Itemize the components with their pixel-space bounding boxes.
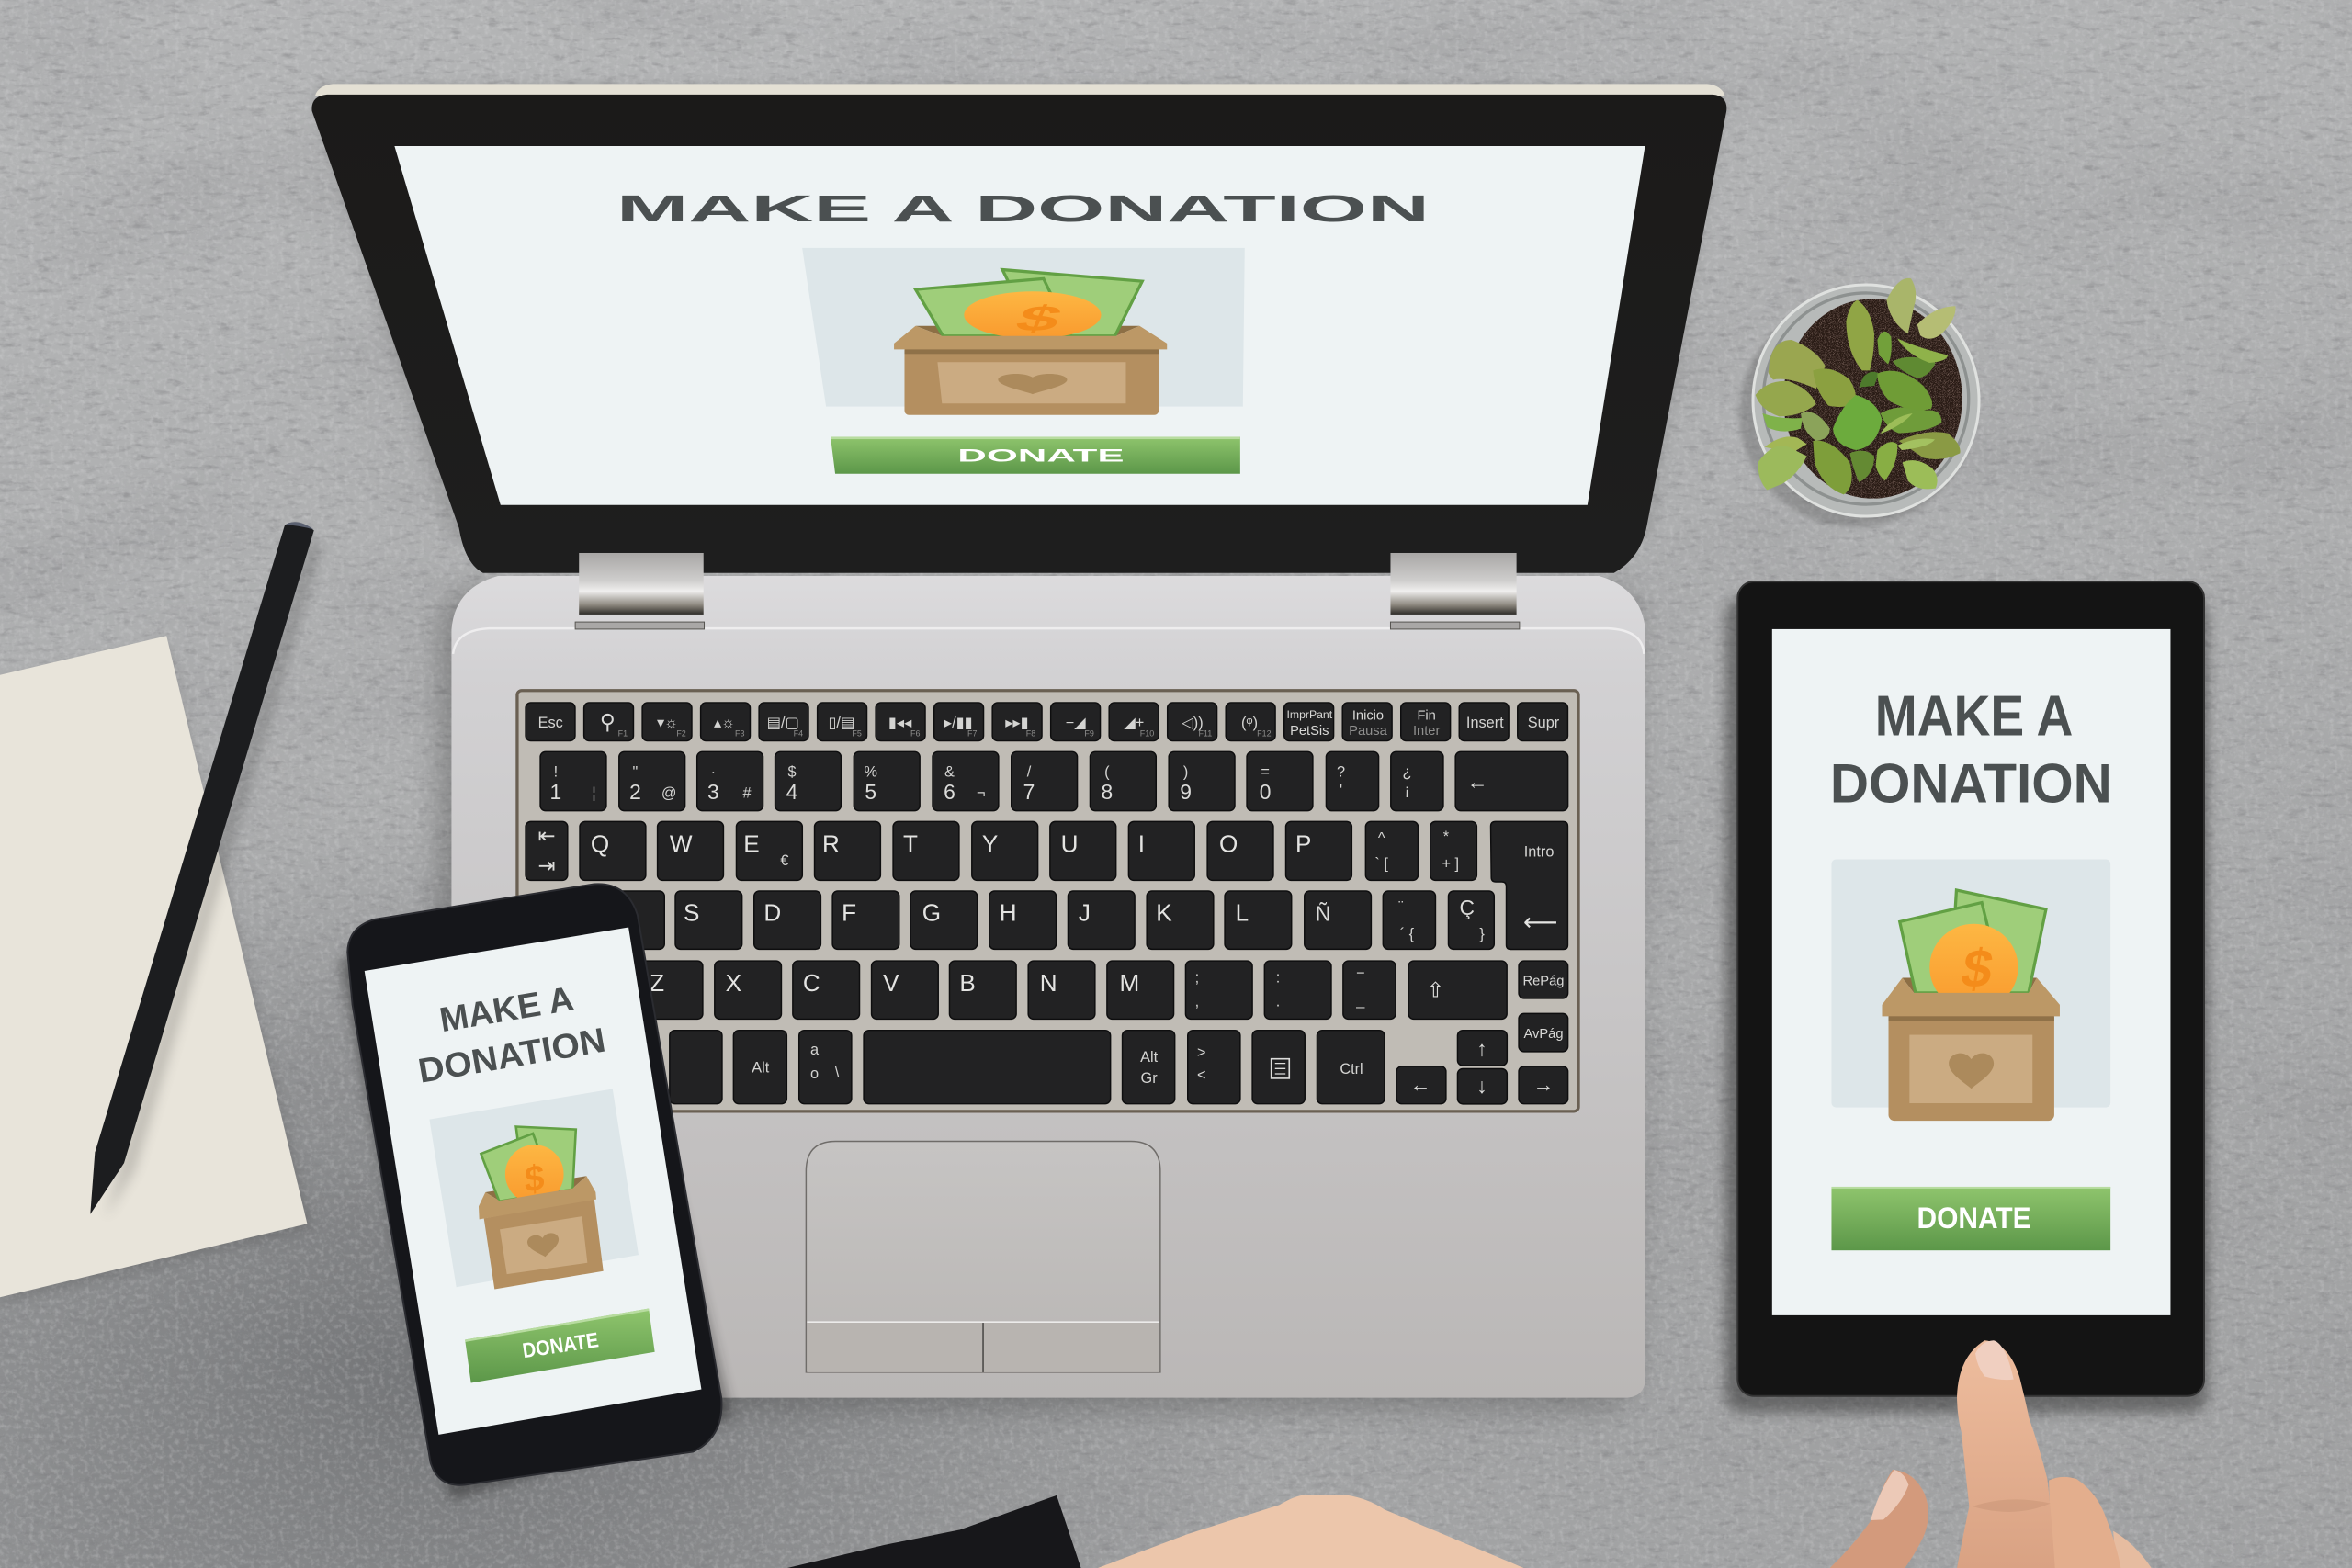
tablet screen [1772,629,2170,1315]
tablet screen title [1830,685,2112,815]
QWERTY key row: T [903,829,918,857]
bottom key row: \ [835,1064,840,1080]
laptop illustration: donation box [802,248,1245,415]
bottom key row: a [810,1042,820,1058]
QWERTY key row: ⇤ [538,824,556,848]
number key row: % [864,764,877,781]
ASDF key row: F [842,898,856,926]
hinges [575,553,1520,629]
laptop shadow [438,588,1638,1410]
left finger [1830,1470,1928,1568]
fingers [1830,1340,2152,1568]
plant pot shadow [1739,300,1973,526]
ZXCV key row: C [803,969,820,997]
black sleeve [785,1495,1081,1568]
smartphone screen title [415,979,608,1090]
function key row: Pausa [1349,724,1388,739]
smartphone illustration: donation box: $ [524,1156,545,1201]
function key row: −◢ [1066,715,1086,731]
tablet donate button [1831,1187,2110,1250]
ASDF key row: Ñ [1316,901,1330,925]
smartphone body [347,884,721,1485]
function key row: F4 [794,729,803,739]
number key row: · [711,764,716,781]
ASDF key row: J [1079,898,1091,926]
ZXCV key row: X [726,969,741,997]
QWERTY key row: R [822,829,840,857]
number key row: 4 [786,780,798,804]
index finger [1957,1340,2055,1568]
number key row: " [633,764,639,781]
ZXCV key row: N [1040,969,1057,997]
smartphone shadow [339,900,732,1500]
number key row: ? [1337,764,1345,781]
bottom key row: ↓ [1476,1074,1487,1098]
QWERTY key row: + ] [1442,855,1459,872]
QWERTY key row: Intro [1524,843,1554,860]
smartphone illustration: donation box [429,1089,639,1289]
ZXCV key row: RePág [1523,975,1564,989]
function key row: ◢+ [1124,715,1144,731]
function key row: F11 [1198,729,1212,739]
number key row: ' [1340,782,1342,798]
function key row [526,703,1567,741]
ASDF key row: D [763,898,781,926]
function key row: Fin [1417,709,1436,724]
bottom key row: Gr [1141,1070,1158,1087]
function key row: ▸/▮▮ [944,715,973,731]
number key row: 3 [707,780,719,804]
glass pot with soil [1753,285,1979,516]
tablet screen title: DONATION [1830,751,2112,815]
bottom key row: Alt [1140,1049,1159,1066]
ZXCV key row: _ [1355,992,1365,1009]
number key row [540,751,1568,811]
far finger behind [2113,1531,2152,1568]
tablet screen title: MAKE A [1875,685,2073,749]
bottom key row: o [810,1066,819,1082]
QWERTY key row: Q [591,829,609,857]
tablet body [1737,581,2204,1396]
ASDF key row: L [1236,898,1249,926]
bottom key row: → [1533,1073,1554,1097]
tablet [1725,581,2208,1413]
QWERTY key row: * [1443,829,1450,845]
number key row: & [944,764,955,781]
ASDF key row: Ç [1459,896,1475,919]
laptop screen title: MAKE A DONATION [616,187,1430,230]
ZXCV key row: , [1195,994,1199,1010]
number key row: ¬ [977,785,986,802]
laptop lid [311,84,1726,573]
bottom key row: ↑ [1476,1036,1487,1060]
function key row: ▤/▢ [767,715,799,731]
function key row: F10 [1140,729,1154,739]
tablet illustration: donation box [1831,860,2110,1121]
function key row: ⚲ [600,709,616,733]
function key row: ▸▸▮ [1005,715,1029,731]
function key row: ▮◂◂ [888,715,912,731]
ASDF key row: } [1479,926,1485,942]
function key row: F7 [967,729,978,739]
function key row: F9 [1084,729,1094,739]
ASDF key row: ´ { [1400,926,1415,942]
number key row: 2 [629,780,641,804]
potted plant [1739,278,1979,526]
smartphone donate button: DONATE [521,1327,600,1362]
function key row: F8 [1026,729,1035,739]
QWERTY key row: E [743,829,760,857]
smartphone screen title: MAKE A [436,979,576,1039]
bottom key row [670,1013,1568,1104]
smartphone screen [365,928,701,1435]
pen [90,522,324,1218]
function key row: F1 [618,729,628,739]
number key row: 6 [944,780,956,804]
number key row: @ [662,785,676,802]
laptop [311,84,1726,1410]
function key row: Esc [538,715,563,731]
function key row: Insert [1466,715,1504,731]
bottom key row: Ctrl [1340,1061,1363,1077]
QWERTY key row: ` [ [1374,855,1388,872]
number key row: 5 [865,780,876,804]
function key row: F3 [735,729,744,739]
function key row: Supr [1528,715,1560,731]
number key row: # [743,785,752,802]
number key row: = [1261,764,1270,781]
function key row: ▾☼ [657,715,678,731]
middle finger [2049,1477,2120,1568]
bottom key row: ← [1410,1073,1431,1097]
number key row: ( [1104,764,1110,781]
smartphone donate button [465,1309,655,1383]
QWERTY key row: ⟵ [1523,908,1557,935]
number key row: ¦ [592,785,596,802]
number key row: ¡ [1405,782,1409,798]
number key row: ) [1183,764,1188,781]
keyboard [517,691,1578,1111]
ASDF key row: ¨ [1398,899,1404,916]
function key row: ▴☼ [714,715,735,731]
laptop donate button: DONATE [957,446,1125,467]
QWERTY key row: W [670,829,693,857]
ASDF key row: G [922,898,941,926]
ASDF key row [600,891,1494,949]
QWERTY key row: O [1219,829,1238,857]
tablet shadow [1725,597,2208,1413]
QWERTY key row: P [1295,829,1311,857]
ZXCV key row: . [1276,994,1280,1010]
laptop screen [394,146,1645,505]
bottom key row: Alt [752,1059,770,1076]
function key row: F6 [910,729,920,739]
number key row: 7 [1023,780,1035,804]
QWERTY key row: € [780,852,788,869]
number key row: 1 [550,780,561,804]
ZXCV key row: Z [650,969,664,997]
ZXCV key row: M [1120,969,1139,997]
ZXCV key row: : [1276,969,1280,986]
hand: fingers tapping the tablet [785,1340,2152,1568]
ASDF key row: S [684,898,699,926]
ZXCV key row: ⇧ [1427,978,1444,1002]
smartphone [339,884,732,1500]
ZXCV key row [636,961,1568,1019]
number key row: $ [788,764,797,781]
tablet illustration: donation box: $ [1957,938,1997,998]
bottom key row: AvPág [1523,1027,1564,1042]
QWERTY key row [526,821,1567,950]
number key row: ← [1467,770,1488,794]
laptop base [451,576,1645,1398]
number key row: 8 [1102,780,1113,804]
number key row: ¿ [1402,764,1411,781]
laptop illustration: donation box: $ [1009,299,1069,338]
ZXCV key row: V [883,969,899,997]
ASDF key row: K [1156,898,1172,926]
laptop donate button [831,436,1240,474]
ZXCV key row: B [959,969,976,997]
number key row: 9 [1180,780,1192,804]
function key row: F2 [676,729,686,739]
function key row: ImprPant [1286,708,1333,721]
function key row: ▯/▤ [828,715,854,731]
QWERTY key row: I [1138,829,1145,857]
bottom key row: < [1197,1067,1206,1084]
function key row: Inicio [1352,709,1384,724]
bottom key row: > [1197,1044,1206,1061]
QWERTY key row: U [1061,829,1079,857]
tablet donate button: DONATE [1917,1201,2031,1235]
number key row: 0 [1260,780,1272,804]
smartphone screen title: DONATION [415,1021,608,1090]
function key row: F12 [1257,729,1272,739]
succulent leaves [1756,278,1961,494]
QWERTY key row: ^ [1378,830,1385,847]
ASDF key row: H [1000,898,1017,926]
function key row: Inter [1413,724,1440,739]
number key row: ! [554,764,558,781]
number key row: / [1027,764,1032,781]
function key row: (ᵠ) [1241,715,1258,731]
QWERTY key row: ⇥ [538,853,556,877]
QWERTY key row: Y [982,829,998,857]
function key row: ◁)) [1182,715,1204,731]
hand back [1096,1495,1525,1568]
ZXCV key row: − [1356,965,1365,982]
trackpad [806,1141,1160,1372]
ZXCV key row: ; [1195,969,1199,986]
function key row: PetSis [1290,724,1329,739]
paper sheet [0,636,312,1303]
function key row: F5 [852,729,862,739]
